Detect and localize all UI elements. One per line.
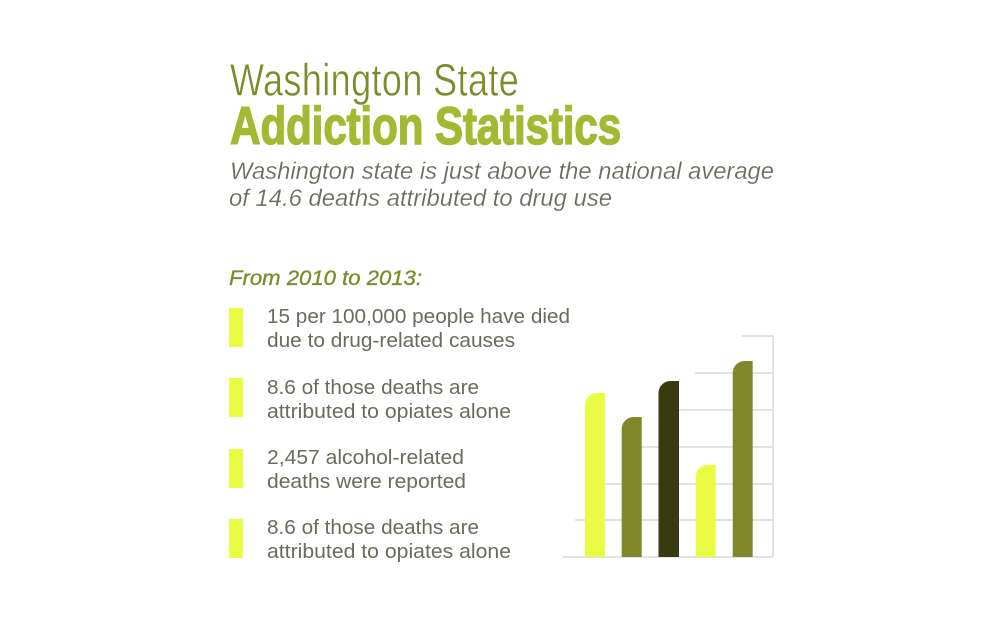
title [230, 55, 621, 156]
bar 3 [658, 381, 679, 557]
stat list [229, 306, 570, 563]
list heading: From 2010 to 2013: [229, 267, 422, 290]
stat item 3: 2,457 alcohol-related [267, 447, 464, 469]
bar 2 [622, 417, 642, 557]
title line: Addiction Statistics: Addiction Statistics [230, 98, 621, 156]
subtitle: of 14.6 deaths attributed to drug use [229, 185, 612, 212]
stat item 1: 15 per 100,000 people have died [267, 306, 570, 328]
title line: Washington State: Washington State [230, 55, 519, 105]
stat item 2: attributed to opiates alone [267, 401, 511, 423]
stat item 2: 8.6 of those deaths are [267, 377, 479, 399]
subtitle: Washington state is just above the national average [230, 158, 774, 185]
stat item 2 [229, 377, 511, 423]
subtitle [229, 158, 774, 212]
bar chart [563, 336, 773, 557]
stat item 1: due to drug-related causes [267, 330, 515, 352]
bar 4 [696, 465, 716, 557]
stat item 4 [229, 517, 511, 563]
stat item 3: deaths were reported [267, 471, 466, 493]
bar 1 [585, 393, 605, 557]
stat item 4: 8.6 of those deaths are [267, 517, 479, 539]
stat item 1 [229, 306, 570, 352]
bar 5 [733, 361, 753, 557]
stat item 4: attributed to opiates alone [267, 541, 511, 563]
stat item 3 [229, 447, 466, 493]
